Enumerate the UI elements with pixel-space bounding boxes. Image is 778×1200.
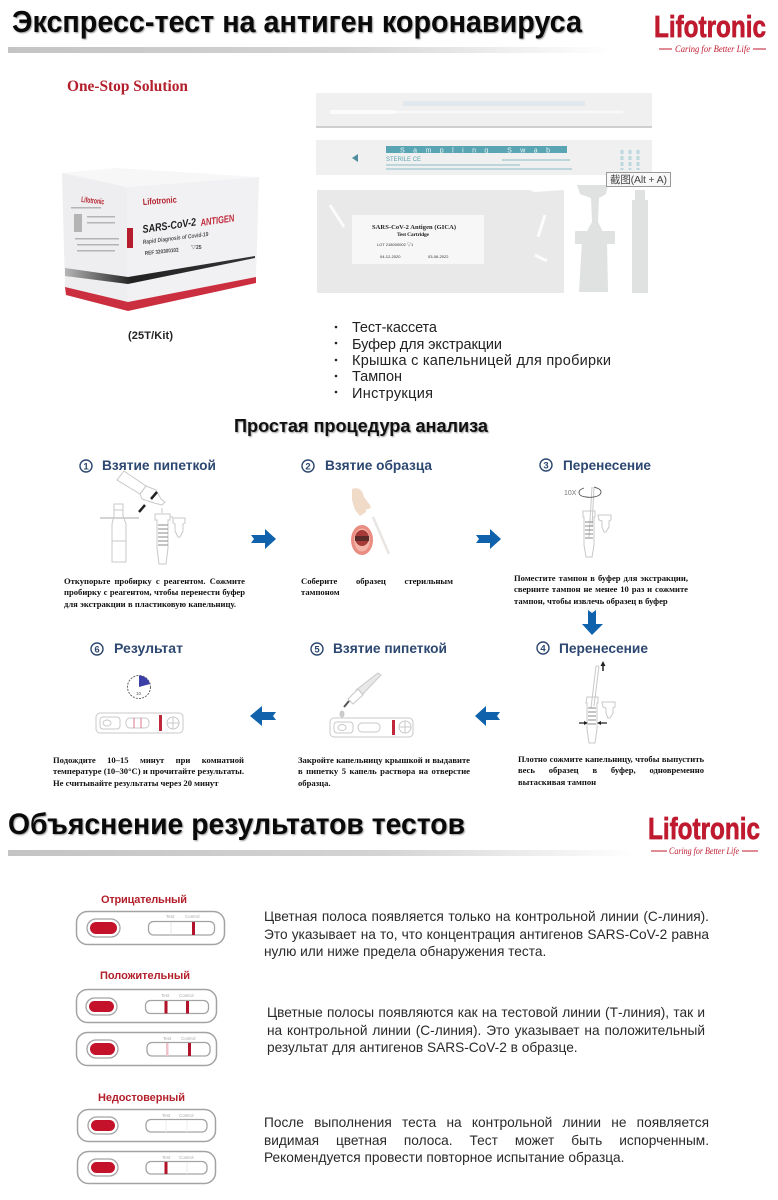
- text: positive explanation: результат для антигенов SARS-CoV-2 в образце.: [267, 1040, 578, 1055]
- step 5: pipetting: Закройте капельницу крышкой и выдавите: [298, 755, 470, 765]
- step 3: transfer: сверните тампон не менее 10 раз и сожмите: [514, 584, 688, 594]
- icon: reagent vial and dropper: [100, 471, 185, 564]
- step 6: result: Не считывайте результаты через 20 минут: [53, 778, 218, 788]
- icon: timer: 10: [136, 691, 142, 696]
- step 3: transfer: Поместите тампон в буфер для экстракции,: [514, 573, 688, 583]
- step 6: result: 6: [94, 644, 100, 656]
- product box: SARS-CoV-2 Antigen kit: REF 320300102: [145, 247, 179, 257]
- panel: negative result: [76, 894, 226, 946]
- dropper: [575, 185, 615, 292]
- cassette: weak test line: Test: [163, 1036, 172, 1041]
- screenshot tooltip: 截图(Alt + A): [610, 173, 667, 186]
- step 1: pipetting: 1: [83, 462, 89, 472]
- test cartridge pouch: 03-06-2022: [428, 254, 449, 259]
- list: kit contents: Тест-кассета: [352, 320, 438, 336]
- icon: squeezing tube, removing swab: [586, 666, 615, 743]
- icon: nose, mouth and swab: [351, 488, 389, 555]
- arrow: step 5 to 6: [250, 706, 276, 726]
- cassette: weak test line: [76, 1032, 216, 1066]
- test cartridge pouch: 04-12-2020: [380, 254, 401, 259]
- arrow: step 4 to 5: [475, 706, 500, 726]
- text: invalid explanation: Рекомендуется провести повторное испытание образца.: [264, 1150, 624, 1165]
- test cartridge pouch: SARS-CoV-2 Antigen (GICA): [372, 224, 456, 231]
- step 6: result: Подождите 10–15 минут при комнатной: [53, 755, 244, 765]
- step 2: sample collection: [301, 457, 453, 597]
- panel: positive result: Положительный: [100, 970, 190, 982]
- step 2: sample collection: Взятие образца: [325, 457, 432, 473]
- header: product title: Экспресс-тест на антиген коронавируса: [12, 4, 583, 39]
- text: invalid explanation: видимая цветная полоса. Тест может быть испорченным.: [264, 1133, 709, 1148]
- heading: simple procedure: Простая процедура анализа: [234, 416, 489, 436]
- text: negative explanation: [264, 909, 709, 959]
- step 5: pipetting: Взятие пипеткой: [333, 640, 447, 656]
- icon: swab rotating in tube: [583, 487, 611, 557]
- list: kit contents: Крышка с капельницей для пробирки: [352, 353, 611, 369]
- logo: Lifotronic lower: Caring for Better Life: [669, 846, 739, 856]
- text: negative explanation: Цветная полоса появляется только на контрольной линии (С-линия).: [264, 909, 709, 924]
- text: invalid explanation: После выполнения теста на контрольной линии не появляется: [264, 1115, 709, 1130]
- text: positive explanation: Цветные полосы появляются как на тестовой линии (Т-линия), так и: [267, 1005, 705, 1020]
- step 1: pipetting: Взятие пипеткой: [102, 457, 216, 473]
- step 1: pipetting: Откупорьте пробирку с реагентом. Сожмите: [64, 576, 245, 586]
- swab label: STERILE CE: [386, 157, 421, 163]
- cassette: test line only: Test: [162, 1155, 171, 1160]
- cassette: weak test line: Control: [181, 1036, 196, 1041]
- text: negative explanation: нулю или ниже предела обнаружения теста.: [264, 944, 546, 959]
- panel: positive result: [76, 970, 218, 1066]
- step 6: result: [53, 640, 244, 788]
- step 5: pipetting: [298, 640, 470, 788]
- heading: One-Stop Solution: One-Stop Solution: [67, 78, 188, 95]
- icon: result cassette: [96, 713, 183, 733]
- logo: Lifotronic lower: [648, 811, 760, 856]
- cassette: strong test line: Test: [161, 993, 170, 998]
- swab pouch: [316, 93, 652, 128]
- step 3: transfer: тампон, чтобы извлечь образец в буфер: [514, 596, 668, 606]
- arrow: step 2 to 3: [476, 529, 501, 549]
- panel: invalid result: Недостоверный: [98, 1092, 185, 1104]
- cassette: no lines: [78, 1110, 216, 1142]
- step 4: transfer: Перенесение: [559, 640, 648, 656]
- product box: SARS-CoV-2 Antigen kit: Lifotronic: [142, 195, 177, 207]
- cassette: test line only: Control: [179, 1155, 194, 1160]
- list: kit contents: [334, 320, 611, 402]
- step 2: sample collection: тампоном: [301, 587, 340, 597]
- step 6: result: Результат: [114, 640, 183, 656]
- kit components photo: [316, 93, 671, 293]
- text: negative explanation: Это указывает на то, что концентрация антигенов SARS-CoV-2 равна: [264, 927, 709, 942]
- step 5: pipetting: 5: [314, 644, 320, 656]
- step 5: pipetting: в пипетку 5 капель раствора на отверстие: [298, 766, 470, 776]
- list: kit contents: Тампон: [352, 369, 402, 385]
- panel: negative result: Test: [166, 914, 175, 919]
- step 4: transfer: Плотно сожмите капельницу, чтобы выпустить: [518, 754, 704, 764]
- step 3: transfer: 3: [543, 460, 549, 472]
- product box: SARS-CoV-2 Antigen kit: Lifotronic: [81, 195, 105, 206]
- test cartridge pouch: [317, 190, 564, 293]
- step 1: pipetting: для экстракции в пластиковую капельницу.: [64, 599, 236, 609]
- header: product title: [8, 4, 584, 53]
- cassette: no lines: Test: [162, 1113, 171, 1118]
- step 6: result: температуре (10–30°C) и прочитайте результаты.: [53, 766, 244, 776]
- panel: negative result: Отрицательный: [101, 894, 187, 906]
- product box: SARS-CoV-2 Antigen kit: ANTIGEN: [199, 213, 236, 229]
- caption: 25T/Kit: (25T/Kit): [128, 330, 173, 342]
- step 4: transfer: 4: [540, 644, 546, 654]
- text: invalid explanation: [264, 1115, 709, 1165]
- step 3: transfer: [514, 457, 688, 606]
- list: kit contents: Буфер для экстракции: [352, 337, 502, 353]
- text: positive explanation: на контрольной линии (С-линия). Это указывает на положительный: [267, 1023, 705, 1038]
- header: explanation of results: Объяснение результатов тестов: [8, 808, 465, 841]
- header: explanation of results: [8, 808, 588, 856]
- step 4: transfer: [518, 640, 704, 787]
- product box: SARS-CoV-2 Antigen kit: Rapid Diagnosis of Covid-19: [143, 232, 209, 246]
- step 3: transfer: Перенесение: [563, 457, 651, 473]
- step 1: pipetting: пробирку с реагентом, чтобы перенести буфер: [64, 587, 245, 597]
- step 5: pipetting: образца.: [298, 778, 331, 788]
- test cartridge pouch: Test Cartridge: [397, 232, 430, 238]
- arrow: step 3 to 4: [582, 610, 603, 635]
- product box: SARS-CoV-2 Antigen kit: [62, 173, 259, 311]
- tube: [632, 190, 648, 293]
- text: positive explanation: [267, 1005, 705, 1055]
- product box: SARS-CoV-2 Antigen kit: ▽25: [191, 245, 202, 251]
- step 4: transfer: весь образец в буфер, одновременно: [518, 765, 704, 775]
- logo: Lifotronic top: Caring for Better Life: [675, 44, 750, 54]
- step 2: sample collection: Соберите образец стерильным: [301, 576, 453, 586]
- cassette: no lines: Control: [179, 1113, 194, 1118]
- arrow: step 1 to 2: [251, 529, 276, 549]
- step 1: pipetting: [64, 457, 245, 609]
- icon: dropper over cassette: [330, 673, 413, 737]
- cassette: strong test line: [76, 990, 216, 1022]
- swab label: Sampling Swab: [400, 148, 550, 154]
- panel: invalid result: [76, 1092, 216, 1184]
- product box: SARS-CoV-2 Antigen kit: SARS-CoV-2: [142, 217, 197, 236]
- cassette: strong test line: Control: [179, 993, 194, 998]
- panel: negative result: Control: [185, 914, 200, 919]
- step 4: transfer: вытаскивая тампон: [518, 777, 596, 787]
- list: kit contents: Инструкция: [352, 386, 433, 402]
- icon: timer: [128, 676, 150, 698]
- test cartridge pouch: LOT 218000002 ▽1: [377, 242, 414, 247]
- step 2: sample collection: 2: [305, 462, 311, 472]
- step 3: transfer: 10X: [564, 490, 577, 497]
- swab label: [316, 140, 652, 175]
- cassette: test line only: [78, 1152, 216, 1184]
